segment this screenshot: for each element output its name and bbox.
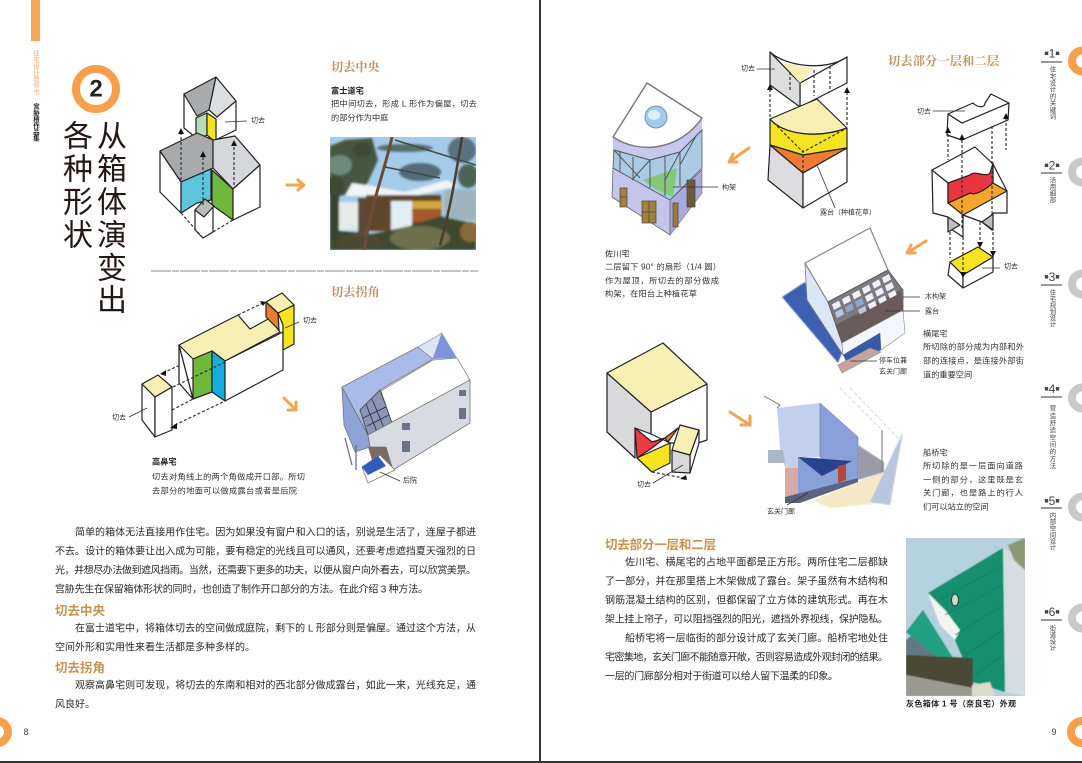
- tab 2: ■2■: [1044, 158, 1060, 172]
- render: Funabashi house street: [764, 388, 903, 508]
- arrow: to photo: [287, 180, 304, 190]
- label: frame: [673, 182, 736, 192]
- chapter title: 变: [97, 252, 127, 286]
- sidebar vertical series title: 住宅设计教师书: [32, 49, 39, 96]
- page number 8: 8: [23, 727, 29, 737]
- chapter title: 状: [63, 220, 93, 252]
- label: cut lower: 切去: [1004, 262, 1018, 270]
- label: terrace: [885, 306, 939, 316]
- tab 3: 住宅规划设计: [1048, 288, 1056, 329]
- caption: Sagawa house: [605, 248, 721, 298]
- caption: Sagawa house: 作为屋顶，所切去的部分做成: [605, 276, 719, 286]
- diagram: Funabashi massing: [607, 343, 707, 480]
- caption: Funabashi house: 们可以站立的空间: [923, 502, 989, 512]
- label: cut Funabashi: 切去: [637, 480, 651, 488]
- body text: left page: 风良好。: [55, 698, 95, 710]
- body text: left page: 简单的箱体无法直接用作住宅。因为如果没有窗户和入口的话，别说是生活了，连屋子都进: [75, 526, 476, 538]
- label: entry porch: 玄关门廊: [767, 506, 795, 516]
- tab 1: [1041, 46, 1082, 120]
- body text: right page: 一层的门廊部分相对于街道可以给人留下温柔的印象。: [605, 670, 838, 682]
- caption: Funabashi house: 关门廊，也是路上的行人: [923, 488, 1023, 498]
- caption: Fujimichi house: 把中间切去，形成 L 形作为偏屋，切去: [331, 98, 477, 108]
- tab 2: 活用细部: [1048, 176, 1056, 204]
- body text: left page: 不去。设计的箱体要让出入成为可能，要有稳定的光线且可以通风，还要考虑遮挡夏天强烈的日: [55, 544, 476, 558]
- caption: Fujimichi house: [331, 86, 477, 122]
- diagram: cut centre massing: [160, 77, 260, 238]
- body text: right page: 船桥宅将一层临街的部分设计成了玄关门廊。船桥宅地处住: [625, 632, 888, 644]
- caption: Yokoo house: 部的连接点，是连接外部街: [923, 356, 1024, 366]
- label: cut right: [285, 316, 317, 328]
- chapter title: 从: [97, 120, 127, 154]
- dashed divider: [151, 270, 478, 272]
- chapter title: 各: [63, 120, 93, 154]
- tab 4: 营造舒适空间的方法: [1048, 404, 1056, 470]
- bottom edge line: [0, 761, 1082, 763]
- caption: Funabashi house: 一侧的部分，这里既是玄: [923, 474, 1023, 484]
- label: cut lower: [982, 262, 1018, 270]
- tab 6: 街道设计: [1048, 624, 1056, 652]
- label: cut left: [112, 408, 147, 422]
- caption: Sagawa house: 佐川宅: [605, 248, 630, 258]
- body text: left page: 宫胁先生在保留箱体形状的同时，也创造了制作开口部分的方法。在此介绍 3 种方法。: [55, 582, 428, 596]
- subheading: first and second floors: 切去部分一层和二层: [605, 537, 716, 552]
- chapter title: [63, 120, 127, 318]
- page spine divider: [539, 0, 541, 763]
- render: Takahana house: [342, 333, 470, 483]
- body text: left page: 观察高鼻宅则可发现，将切去的东南和相对的西北部分做成露台，如此一来，光线充足，通: [75, 678, 476, 692]
- label: cut right: 切去: [303, 316, 317, 324]
- body text: left page: 光，并想尽办法做到遮风挡雨。当然，还需要下更多的功夫，以便从窗户向外看去，可以欣赏美景。: [55, 564, 476, 576]
- caption: Funabashi house: [923, 448, 1023, 512]
- tab 1: 住宅设计的关键词: [1048, 65, 1056, 120]
- tab 5: [1041, 494, 1082, 552]
- body text: right page: 宅密集地，玄关门廊不能随意开敞，否则容易造成外观封闭的结果。: [605, 650, 888, 664]
- label: cut upper: 切去: [917, 106, 931, 116]
- chapter title: 体: [97, 186, 127, 220]
- label: parking and entry porch: 玄关门廊: [879, 366, 907, 376]
- body text: left page: 在富士道宅中，将箱体切去的空间做成庭院，剩下的 L 形部分则是偏屋。通过这个方法，从: [75, 622, 476, 634]
- tab 6: ■6■: [1044, 605, 1060, 619]
- caption: Funabashi house: 船桥宅: [923, 448, 948, 458]
- subheading: cut centre: 切去中央: [55, 603, 106, 618]
- chapter number badge: [76, 69, 116, 109]
- photo caption: 灰色箱体 1 号（奈良宅）外观: [906, 698, 1016, 708]
- caption: Takahana house: [152, 456, 305, 496]
- page marker: right ring: [1071, 721, 1082, 743]
- render: Yokoo house: [782, 228, 905, 373]
- caption: Yokoo house: [923, 328, 1024, 380]
- body text: left page: 空间外形和实用性来看生活都是多种多样的。: [55, 640, 255, 654]
- label: wooden frame: [903, 292, 946, 300]
- body text: right page: [605, 537, 888, 682]
- arrow: Funabashi massing to render: [730, 412, 750, 425]
- body text: right page: 钢筋混凝土结构的区别，但都保留了立方体的建筑形式。再在木: [605, 594, 888, 606]
- arrow: fan box to Sagawa: [729, 148, 749, 162]
- sidebar vertical series title: [32, 49, 39, 143]
- heading: cut corners: 切去拐角: [331, 284, 380, 299]
- tab 6: [1041, 605, 1082, 652]
- body text: right page: 了一部分，并在那里搭上木架做成了露台。架子虽然有木结构和: [605, 574, 888, 588]
- photo: Fujimichi house among pines: [326, 137, 480, 250]
- caption: Yokoo house: 道的重要空间: [923, 370, 972, 380]
- caption: Fujimichi house: 的部分作为中庭: [331, 112, 388, 122]
- chapter number badge: 2: [89, 76, 103, 102]
- diagram: cut corners massing: [142, 293, 294, 437]
- tab 5: 内部空间设计: [1048, 511, 1056, 552]
- label: parking and entry porch: [850, 356, 907, 376]
- chapter title: 演: [97, 220, 127, 252]
- tab 1: ■1■: [1044, 46, 1060, 60]
- label: terrace planting: 露台（种植花草）: [820, 208, 876, 216]
- orange corner tab: [31, 0, 40, 41]
- chapter title: 箱: [97, 154, 127, 186]
- caption: Takahana house: 高鼻宅: [152, 456, 177, 466]
- label: cut top fan: 切去: [741, 64, 755, 72]
- subheading: cut corners: 切去拐角: [55, 660, 105, 675]
- chapter title: 出: [97, 284, 127, 318]
- label: cut upper: [917, 106, 965, 116]
- arrow: to house render: [284, 398, 296, 410]
- tab 5: ■5■: [1044, 494, 1060, 508]
- tab 4: ■4■: [1044, 382, 1060, 396]
- caption: Sagawa house: 二层留下 90° 的扇形（1/4 圆）: [605, 262, 721, 272]
- label: cut left: 切去: [112, 412, 126, 422]
- diagram: fan-shaped massing: [767, 52, 850, 208]
- chapter title: 形: [63, 186, 93, 220]
- label: terrace: 露台: [925, 306, 939, 316]
- arrow: Yokoo massing to render: [907, 241, 926, 253]
- body text: right page: 佐川宅、横尾宅的占地平面都是正方形。两所住宅二层都缺: [625, 556, 888, 568]
- caption: Funabashi house: 所切除的是一层面向道路: [923, 460, 1023, 470]
- label: frame: 构架: [722, 182, 736, 192]
- tab 4: [1041, 382, 1082, 470]
- label: cut top fan: [741, 64, 775, 72]
- photo: Grey Box No.1 green facade: [906, 538, 1025, 696]
- label: parking and entry porch: 停车位兼: [879, 356, 907, 364]
- label: cut: 切去: [251, 116, 265, 124]
- caption: Yokoo house: 所切除的部分成为内部和外: [923, 342, 1024, 352]
- label: entry porch: [767, 493, 808, 516]
- caption: Takahana house: 去部分的地面可以做成露台或者是后院: [152, 486, 297, 496]
- caption: Fujimichi house: 富士道宅: [331, 86, 364, 96]
- label: cut: [225, 116, 265, 124]
- caption: Sagawa house: 构架，在阳台上种植花草: [605, 288, 697, 298]
- label: wooden frame: 木构架: [925, 292, 946, 300]
- heading: cut centre: 切去中央: [331, 59, 381, 74]
- caption: Takahana house: 切去对角线上的两个角做成开口部。所切: [152, 472, 305, 482]
- tab 3: [1041, 270, 1082, 329]
- label: backyard: [380, 472, 417, 484]
- page marker: left ring: [0, 721, 8, 743]
- tab 2: [1041, 158, 1082, 204]
- chapter title: 种: [63, 154, 93, 186]
- page number 9: 9: [1051, 727, 1057, 737]
- sidebar vertical series title: 宫胁檀作品集: [32, 102, 39, 143]
- tab 3: ■3■: [1044, 270, 1060, 284]
- caption: Yokoo house: 横尾宅: [923, 328, 948, 338]
- diagram: Yokoo massing: [932, 94, 1009, 288]
- body text: right page: 架上挂上帘子，可以阻挡强烈的阳光，遮挡外界视线，保护隐私。: [605, 612, 888, 626]
- label: terrace planting: [817, 165, 876, 216]
- body text: left page: [55, 526, 476, 710]
- label: backyard: 后院: [403, 476, 417, 484]
- heading: cut first and second floors: 切去部分一层和二层: [888, 53, 1000, 68]
- label: cut Funabashi: [637, 465, 683, 488]
- render: Sagawa house: [612, 83, 702, 235]
